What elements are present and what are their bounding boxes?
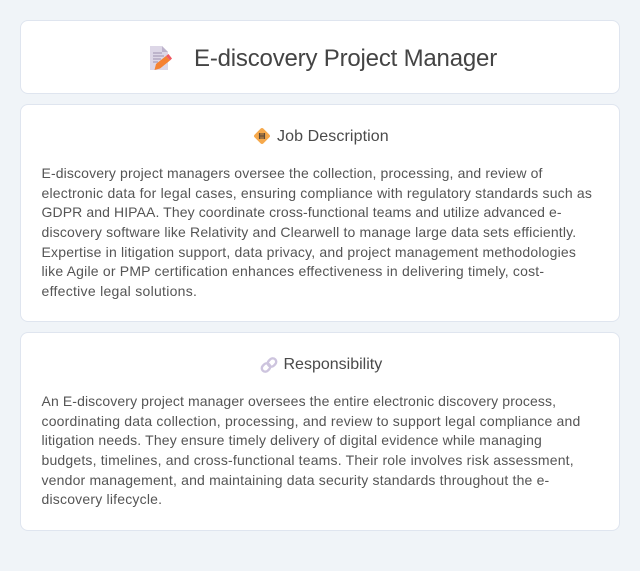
panel: job description: [20, 104, 620, 322]
job description text: effective legal solutions.: [42, 283, 197, 299]
responsibility text: litigation needs. They ensure timely delivery of digital evidence while managing: [42, 432, 542, 448]
responsibility text: budgets, timelines, and cross-functional teams. Their role involves risk assessment,: [42, 452, 574, 468]
job description text: E-discovery project managers oversee the collection, processing, and review of: [42, 165, 543, 181]
responsibility text: [42, 393, 581, 507]
job description text: Expertise in litigation support, data privacy, and project management methodologies: [42, 244, 576, 260]
job description text: discovery software like Relativity and Clearwell to manage large data sets efficiently.: [42, 224, 576, 240]
job description text: [42, 165, 592, 299]
responsibility text: An E-discovery project manager oversees the entire electronic discovery process,: [42, 393, 556, 409]
title: E-discovery Project Manager: [194, 45, 497, 72]
panel: title card: [20, 20, 620, 94]
heading: responsibility: Responsibility: [284, 356, 382, 373]
icon: document with pencil: [150, 46, 172, 70]
icon: chain link: [260, 357, 278, 373]
job description text: electronic data for legal cases, ensuring compliance with regulatory standards such as: [42, 185, 592, 201]
heading: job description: Job Description: [277, 128, 389, 145]
job description text: GDPR and HIPAA. They coordinate cross-functional teams and utilize advanced e-: [42, 204, 562, 220]
icon: diamond sign: [254, 128, 270, 144]
job description text: like Agile or PMP certification enhances effectiveness in delivering timely, cost-: [42, 263, 544, 279]
responsibility text: coordinating data collection, processing, and review to support legal compliance and: [42, 413, 581, 429]
responsibility text: discovery lifecycle.: [42, 491, 162, 507]
panel: responsibility: [20, 332, 620, 531]
responsibility text: vendor management, and maintaining data security standards throughout the e-: [42, 472, 549, 488]
